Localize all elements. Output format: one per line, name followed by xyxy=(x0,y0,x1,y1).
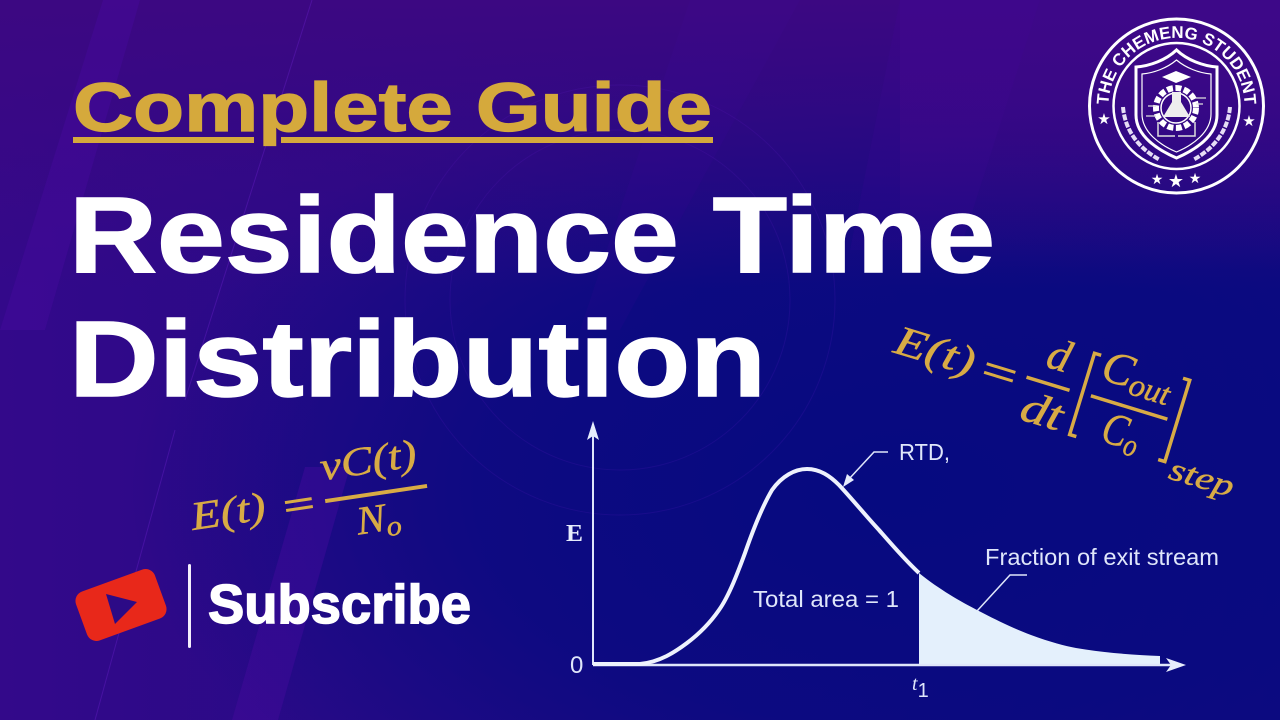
formula: E(t) = d/dt[Cout/Co]step: C xyxy=(1096,401,1141,459)
formula: E(t) = d/dt[Cout/Co]step: C xyxy=(1096,340,1141,397)
axes xyxy=(593,432,1175,665)
shaded fraction of exit stream xyxy=(919,573,1160,665)
formula: E(t) = d/dt[Cout/Co]step: d xyxy=(1042,328,1078,382)
logo stars: ★ xyxy=(1189,171,1201,187)
label: 0: 0 xyxy=(570,652,583,679)
logo laurels xyxy=(1123,107,1230,160)
formula: E(t) = d/dt[Cout/Co]step: o xyxy=(1119,426,1142,464)
label: E: E xyxy=(566,521,583,547)
title: Distribution xyxy=(69,298,766,419)
label: Total area: Total area = 1 xyxy=(753,586,899,612)
RTD curve line xyxy=(593,469,919,664)
formula: E(t) = vC(t)/No: E(t) xyxy=(186,483,269,539)
formula: E(t) = d/dt[Cout/Co]step xyxy=(877,279,1264,504)
logo ring text: THE CHEMENG STUDENT xyxy=(1096,26,1256,104)
title xyxy=(69,174,995,419)
subscribe text: Subscribe xyxy=(208,573,471,635)
label: t1: t xyxy=(912,673,918,695)
label: Fraction of exit stream: Fraction of exit stream xyxy=(985,544,1219,570)
title: Residence Time xyxy=(69,174,995,295)
formula: E(t) = vC(t)/No: o xyxy=(384,510,404,543)
label: t1: 1 xyxy=(918,680,929,702)
formula: E(t) = vC(t)/No: vC(t) xyxy=(317,430,419,489)
logo stars: ★ xyxy=(1151,172,1163,188)
logo shield xyxy=(1136,50,1217,158)
formula: E(t) = vC(t)/No xyxy=(182,430,435,572)
RTD arrow xyxy=(843,452,888,487)
logo gear and flask xyxy=(1146,88,1206,128)
icon: youtube play xyxy=(73,566,169,644)
logo stars: ★ xyxy=(1242,112,1256,130)
formula: E(t) = d/dt[Cout/Co]step: E(t) xyxy=(888,317,981,386)
formula: E(t) = d/dt[Cout/Co]step: out xyxy=(1125,366,1176,413)
heading: Complete Guide: Complete Guide xyxy=(73,69,712,146)
logo: The ChemEng Student xyxy=(1088,18,1265,194)
logo book xyxy=(1158,122,1195,136)
logo cap xyxy=(1162,71,1191,83)
logo stars: ★ xyxy=(1168,171,1184,192)
fraction leader xyxy=(977,575,1027,611)
formula: E(t) = d/dt[Cout/Co]step: step xyxy=(1165,450,1239,504)
formula: E(t) = d/dt[Cout/Co]step: dt xyxy=(1015,381,1072,441)
divider xyxy=(188,564,191,648)
formula: E(t) = vC(t)/No: N xyxy=(353,495,386,543)
logo stars xyxy=(1097,110,1256,192)
logo stars: ★ xyxy=(1097,110,1111,128)
label: RTD: RTD, xyxy=(899,439,950,465)
chart: RTD curve xyxy=(566,421,1219,702)
